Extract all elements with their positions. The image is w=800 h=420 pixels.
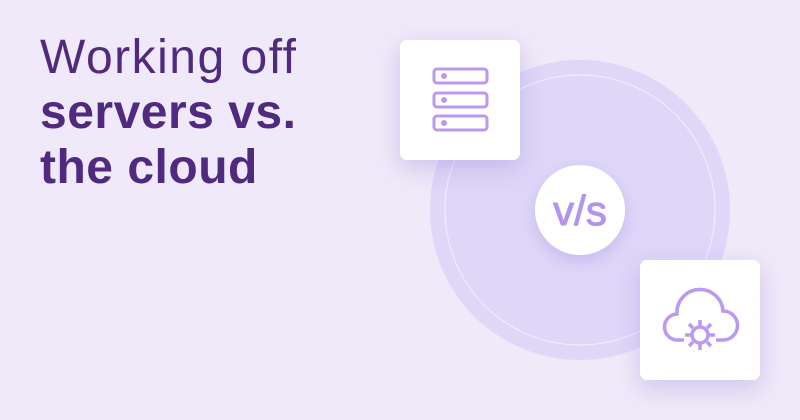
background circle <box>430 60 730 360</box>
v/s badge <box>535 165 625 255</box>
card: cloud icon <box>640 260 760 380</box>
title <box>40 31 298 194</box>
v/s badge: v/s <box>553 187 607 234</box>
title: Working off <box>40 31 298 84</box>
title: servers vs. <box>40 86 296 139</box>
title: the cloud <box>40 141 258 194</box>
card: server icon <box>400 40 520 160</box>
